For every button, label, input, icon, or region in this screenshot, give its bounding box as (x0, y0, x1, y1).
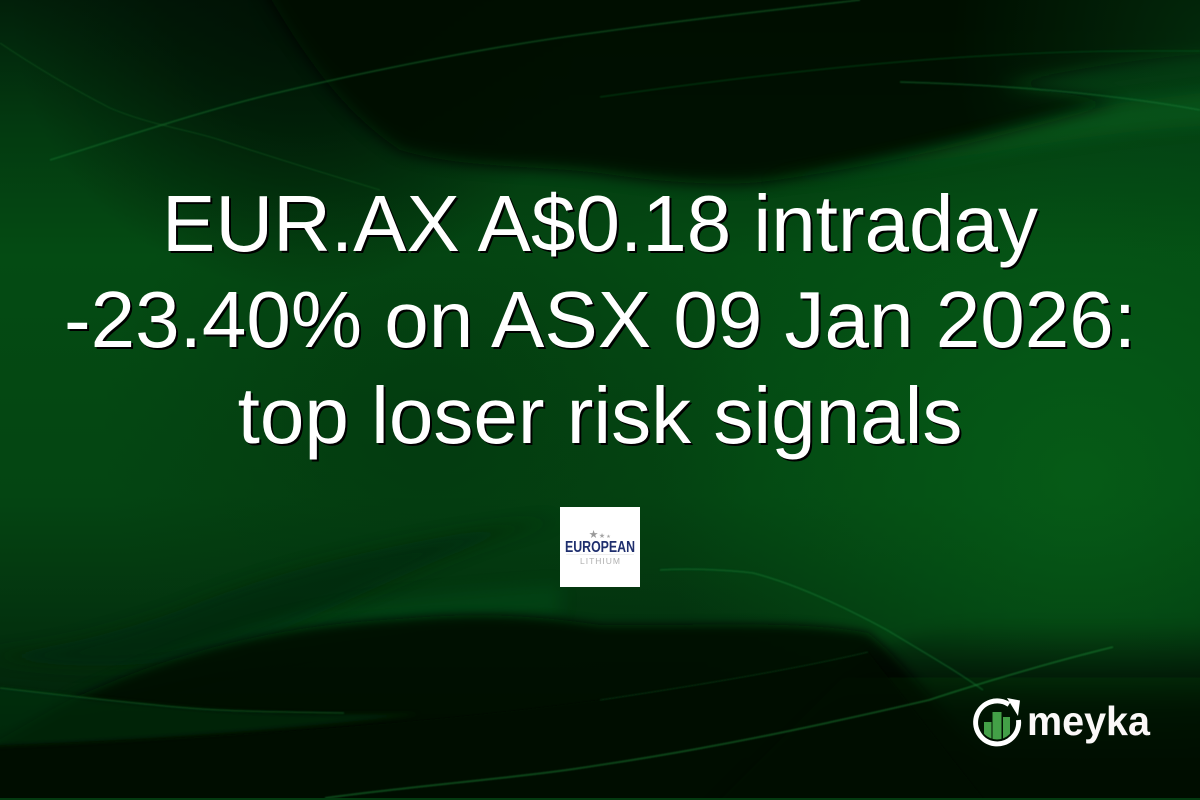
left lower wedge, lighter (0, 686, 420, 746)
top dark swoosh (260, 0, 1200, 184)
bright band upper right (760, 88, 1200, 182)
title: top loser risk signals (238, 371, 962, 460)
wordmark: meyka (1027, 698, 1151, 744)
company logo: European Lithium: ★ (589, 528, 599, 541)
top right lift (0, 0, 1200, 200)
title (64, 179, 1136, 462)
title: EUR.AX A$0.18 intraday (162, 179, 1038, 268)
title: -23.40% on ASX 09 Jan 2026: (64, 275, 1136, 364)
bottom dark band (0, 652, 1000, 800)
bright band under left hump (60, 585, 560, 705)
bottom dark band right (700, 590, 1200, 800)
company logo: European Lithium: ★ (599, 532, 605, 540)
brand logo: meyka (973, 698, 1151, 746)
company logo: European Lithium (560, 507, 640, 587)
company logo: European Lithium: ★ (606, 534, 611, 540)
bottom dark hump (0, 615, 1040, 800)
bottom edge strip (0, 798, 1200, 800)
company logo: European Lithium: LITHIUM (580, 556, 620, 566)
icon: circular arrow with bars (976, 698, 1020, 744)
left dark blob above hump (0, 520, 560, 666)
